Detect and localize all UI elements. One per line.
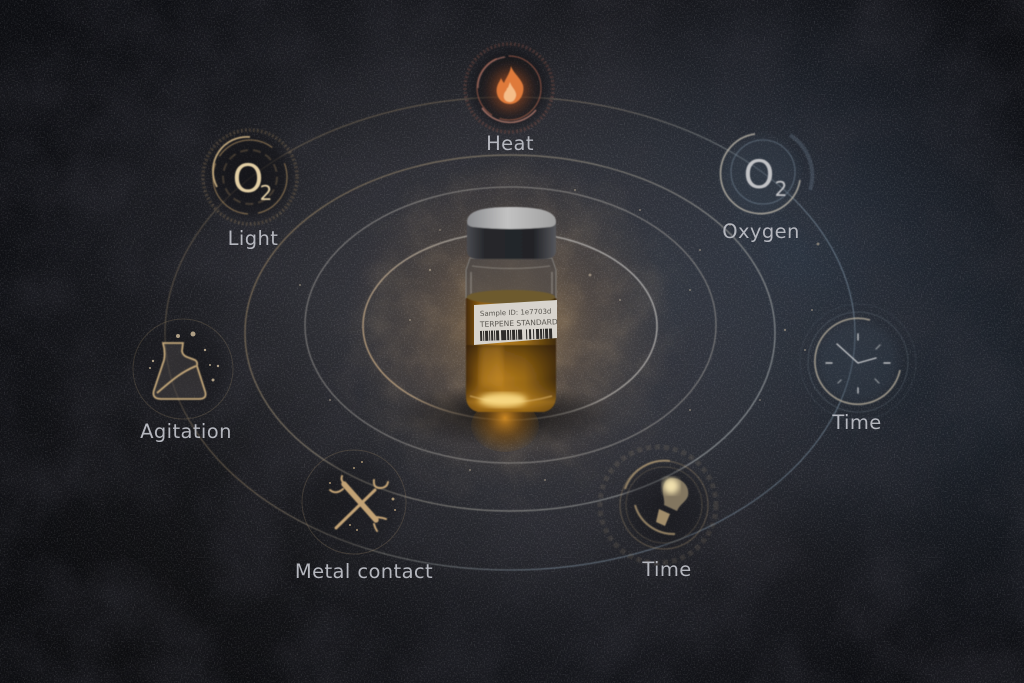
label: Heat: Heat — [486, 132, 534, 155]
icon: clock — [800, 304, 916, 420]
label: Time: Time — [641, 558, 692, 581]
node: heat — [463, 42, 555, 155]
icon: O2 mislabelled light — [202, 129, 298, 225]
icon: O2 mislabelled light: O — [233, 157, 263, 202]
node: time bulb — [600, 447, 716, 581]
dust particles — [299, 189, 820, 481]
label: Oxygen: Oxygen — [722, 220, 800, 243]
barcode — [480, 328, 552, 341]
cap — [467, 207, 556, 259]
label: Sample ID: 1e7703d — [480, 308, 552, 318]
liquid — [466, 290, 556, 412]
label: Agitation: Agitation — [140, 420, 232, 443]
icon: light bulb — [600, 447, 716, 563]
vial — [380, 207, 640, 455]
node: metal contact — [295, 448, 433, 583]
glass body — [466, 258, 556, 298]
icon: O2: 2 — [775, 177, 787, 201]
node: agitation — [131, 317, 235, 443]
icon: O2 mislabelled light: 2 — [260, 181, 272, 205]
icon: flask — [131, 317, 235, 421]
icon: O2: O — [744, 153, 774, 198]
icon: crossed wrenches — [300, 448, 408, 556]
vial shadow and reflection — [380, 385, 640, 455]
label: TERPENE STANDARD — [479, 317, 558, 329]
label: Metal contact: Metal contact — [295, 560, 433, 583]
label: Time: Time — [831, 411, 882, 434]
icon: O2 — [716, 131, 812, 219]
node: oxygen — [716, 131, 812, 243]
label: Light: Light — [228, 227, 278, 250]
node: time clock — [800, 304, 916, 434]
label — [474, 300, 558, 345]
node: light — [202, 129, 298, 250]
orbit rings — [165, 97, 855, 570]
icon: flame — [463, 42, 555, 134]
